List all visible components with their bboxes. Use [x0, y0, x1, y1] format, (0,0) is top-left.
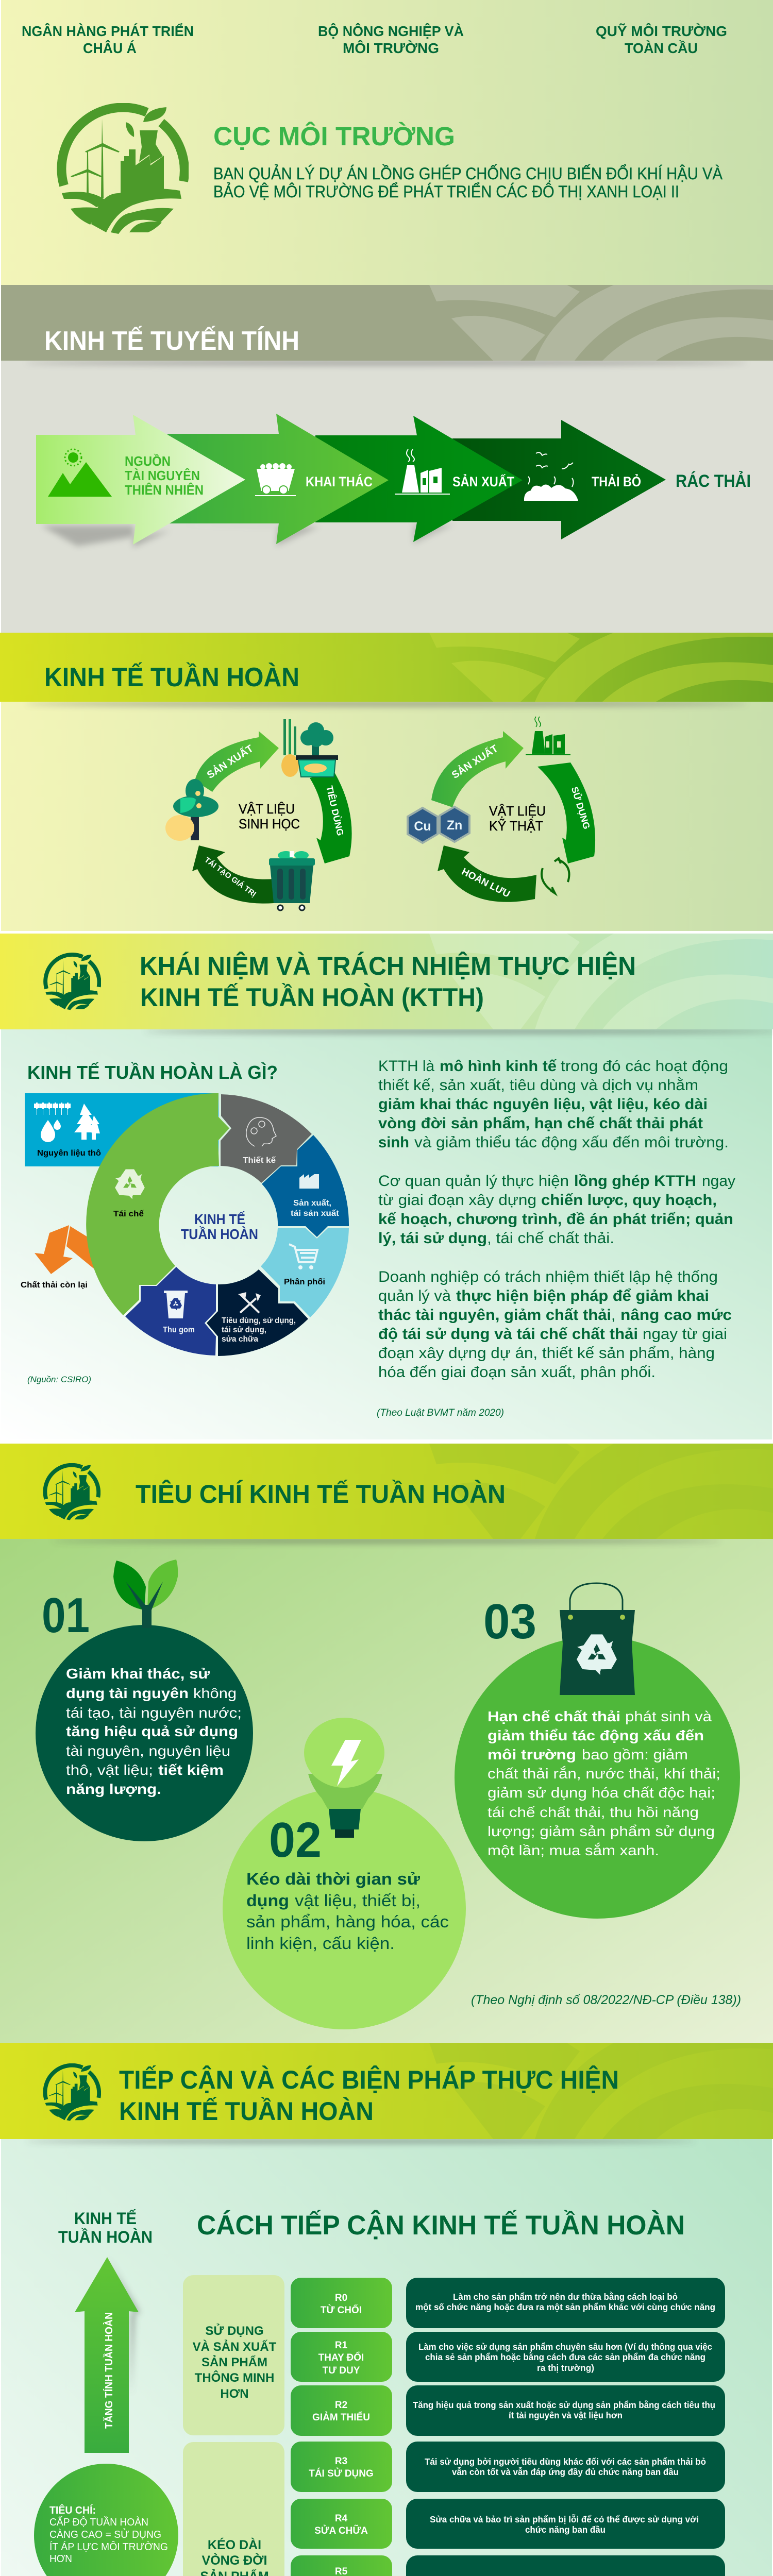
label: waste: RÁC THẢI [676, 471, 751, 491]
heading [119, 2065, 619, 2126]
biological cycle [165, 719, 352, 910]
subheading: CÁCH TIẾP CẬN KINH TẾ TUẦN HOÀN [197, 2209, 685, 2241]
text block: agencies: lồng ghép KTTH [574, 1173, 696, 1190]
text block: enterprises: đoạn xây dựng dự án, thiết kế sản phẩm, hàng [378, 1345, 715, 1362]
title: CỤC MÔI TRƯỜNG [213, 121, 455, 151]
panel: criteria [0, 1444, 773, 2043]
criterion 1: Giảm khai thác, sử [66, 1666, 210, 1682]
criterion 3: tái chế chất thải, thu hồi năng [488, 1804, 699, 1820]
technical cycle: HOÀN LƯU [460, 866, 512, 900]
icon: mining cart [255, 463, 296, 496]
criterion 3 [455, 1583, 740, 1919]
arrow chain [36, 414, 666, 547]
text block: enterprises: ngay từ giai [643, 1326, 727, 1343]
text block: agencies: ngay [702, 1173, 735, 1190]
subtitle: BAN QUẢN LÝ DỰ ÁN LỒNG GHÉP CHỐNG CHỊU BIẾN ĐỔI KHÍ HẬU VÀ [213, 164, 723, 183]
R4 row [291, 2499, 725, 2549]
segment: production: Sản xuất, [293, 1199, 331, 1208]
label: SINH HỌC [239, 816, 300, 832]
R4 row: SỬA CHỮA [314, 2525, 368, 2536]
subheading: KINH TẾ TUẦN HOÀN LÀ GÌ? [27, 1062, 278, 1083]
text block: definition: thiết kế, sản xuất, tiêu dùng và dịch vụ nhằm [378, 1077, 698, 1094]
step: natural resources [125, 453, 204, 498]
partner labels [22, 23, 727, 56]
step: production: SẢN XUẤT [452, 473, 514, 489]
criteria oval: ÍT ÁP LỰC MÔI TRƯỜNG [49, 2541, 168, 2553]
criterion 1: tiết kiệm [158, 1762, 224, 1778]
text block: definition: vòng đời sản phẩm, hạn chế chất thải phát [378, 1115, 703, 1132]
label [489, 803, 546, 834]
source: (Nguồn: CSIRO) [27, 1375, 91, 1384]
heading: KINH TẾ TUẦN HOÀN (KTTH) [140, 983, 484, 1012]
R2 row: R2 [335, 2400, 347, 2411]
segment: distribution [261, 1228, 349, 1317]
orange waste arrow [35, 1225, 95, 1274]
heading [140, 952, 636, 1012]
step: natural resources: THIÊN NHIÊN [125, 482, 204, 498]
criterion 1: thô, vật liệu; [66, 1762, 153, 1778]
criterion 2 [223, 1718, 466, 2029]
icon: recycle loop [542, 858, 569, 893]
criterion 2: Kéo dài thời gian sử [246, 1870, 421, 1888]
icon: logo [45, 1465, 98, 1520]
segment: recycling: Tái chế [113, 1210, 144, 1218]
R3 row: R3 [335, 2456, 347, 2467]
R1 row: Làm cho việc sử dụng sản phẩm chuyên sâu hơn (Ví dụ thông qua việc [418, 2342, 712, 2352]
step: extraction: KHAI THÁC [306, 473, 373, 489]
panel: circular economy [0, 633, 773, 931]
criterion 2: 02 [269, 1812, 322, 1868]
text block: enterprises: nâng cao mức [620, 1307, 732, 1324]
panel: linear economy [1, 285, 773, 633]
criterion 2: vật liệu, thiết bị, [295, 1891, 421, 1910]
criterion 3: 03 [483, 1594, 536, 1649]
criterion 2: linh kiện, cấu kiện. [246, 1934, 395, 1953]
text block: enterprises: Doanh nghiệp có trách nhiệm thiết lập hệ thống [378, 1268, 718, 1285]
text block: definition: mô hình kinh tế [440, 1058, 557, 1075]
R1 row: ra thị trường) [537, 2363, 594, 2373]
R0 row: Làm cho sản phẩm trở nên dư thừa bằng cách loại bỏ [453, 2291, 678, 2302]
segment: consumption: Tiêu dùng, sử dụng, [222, 1316, 296, 1325]
partner labels: CHÂU Á [83, 40, 137, 56]
technical cycle [408, 717, 595, 902]
text block: agencies: , tái chế chất thải. [487, 1230, 614, 1247]
R3 row [291, 2442, 725, 2492]
R4 row: Sửa chữa và bảo trì sản phẩm bị lỗi để có thể được sử dụng với [430, 2514, 699, 2524]
segment: design: Thiết kế [243, 1156, 276, 1165]
icon: copper and zinc: Cu [414, 819, 431, 834]
criterion 3: phát sinh và [625, 1708, 712, 1724]
criterion 3: môi trường [488, 1747, 576, 1762]
icon: recycle bag [560, 1583, 635, 1695]
segment: consumption [207, 1269, 308, 1356]
criterion 3: chất thải rắn, nước thải, khí thải; [488, 1766, 720, 1782]
R4 row: chức năng ban đầu [525, 2524, 606, 2535]
R0 row [291, 2278, 725, 2328]
donut centre label [181, 1211, 258, 1242]
subtitle: BẢO VỆ MÔI TRƯỜNG ĐỂ PHÁT TRIỂN CÁC ĐÔ THỊ XANH LOẠI II [213, 182, 679, 201]
donut chart [86, 1093, 349, 1356]
text block: definition: và giảm thiểu tác động xấu đến môi trường. [414, 1134, 729, 1151]
partner labels: TOÀN CẦU [625, 40, 698, 56]
group: smarter use: VÀ SẢN XUẤT [193, 2339, 277, 2354]
icon: logo [45, 2065, 99, 2121]
source: (Theo Nghị định số 08/2022/NĐ-CP (Điều 138)) [471, 1993, 741, 2007]
panel: header [1, 0, 773, 285]
segment: recycling [86, 1093, 229, 1315]
subtitle [213, 164, 723, 201]
donut centre label: KINH TẾ [194, 1211, 245, 1227]
icon: copper and zinc: Zn [447, 818, 462, 833]
group: smarter use: HƠN [220, 2387, 249, 2401]
partner labels: BỘ NÔNG NGHIỆP VÀ [318, 23, 464, 39]
panel: approaches and measures [0, 2043, 773, 2576]
text block: agencies: lý, tái sử dụng [378, 1230, 487, 1247]
biological cycle: SẢN XUẤT [205, 742, 256, 781]
text block: definition [378, 1058, 729, 1151]
step: natural resources: NGUỒN [125, 453, 171, 469]
segment: collection [125, 1267, 216, 1355]
R3 row: vẫn còn tốt và vẫn đáp ứng đầy đủ chức năng ban đầu [452, 2466, 679, 2477]
criterion 3: bao gồm: giảm [582, 1747, 688, 1762]
step: natural resources: TÀI NGUYÊN [125, 468, 200, 483]
text block: enterprises: thác tài nguyên, giảm chất thải [378, 1307, 611, 1324]
text block: definition: giảm khai thác nguyên liệu, vật liệu, kéo dài [378, 1096, 708, 1113]
criterion 1: không [193, 1685, 237, 1701]
text block: agencies [378, 1173, 735, 1247]
text block: enterprises: , [611, 1307, 615, 1324]
R1 row: chia sẻ sản phẩm hoặc bằng cách đưa các sản phẩm đa chức năng [425, 2351, 705, 2362]
criterion 3: lượng; giảm sản phẩm sử dụng [488, 1823, 715, 1839]
R1 row: THAY ĐỔI [318, 2352, 364, 2363]
R2 row: ít tài nguyên và vật liệu hơn [509, 2410, 623, 2420]
partner labels: NGÂN HÀNG PHÁT TRIỂN [22, 23, 194, 39]
criterion 1: tài nguyên, nguyên liệu [66, 1743, 230, 1759]
icon: logo [61, 107, 184, 234]
label: circular economy [58, 2209, 153, 2246]
label: circular economy: KINH TẾ [74, 2209, 137, 2228]
criterion 3: giảm thiểu tác động xấu đến [488, 1727, 704, 1743]
biological cycle: TIÊU DÙNG [324, 785, 346, 837]
source: (Theo Luật BVMT năm 2020) [377, 1408, 504, 1418]
panel: concept and responsibility [0, 934, 773, 1439]
segment: design [221, 1094, 312, 1183]
text block: agencies: kế hoạch, chương trình, đề án phát triển; quản [378, 1211, 733, 1228]
R3 row: TÁI SỬ DỤNG [309, 2468, 374, 2479]
raw material box [25, 1093, 219, 1166]
group: smarter use: SỬ DỤNG [205, 2323, 264, 2338]
segment: distribution: Phân phối [284, 1278, 325, 1286]
icon: logo [45, 955, 99, 1010]
R2 row [291, 2385, 725, 2436]
icon: light bulb [304, 1718, 384, 1838]
criteria oval: TIÊU CHÍ: [49, 2504, 96, 2516]
R4 row: R4 [335, 2513, 348, 2524]
criteria oval: CÀNG CAO = SỬ DỤNG [49, 2528, 161, 2540]
criterion 3: Hạn chế chất thải [488, 1708, 620, 1724]
icon: sprout [113, 1560, 178, 1628]
heading: TIÊU CHÍ KINH TẾ TUẦN HOÀN [136, 1480, 506, 1509]
R3 row: Tái sử dụng bởi người tiêu dùng khác đối với các sản phẩm thải bỏ [425, 2456, 706, 2467]
R5 row [291, 2555, 725, 2576]
text block: enterprises: thực hiện biện pháp để giảm khai [456, 1287, 709, 1304]
icon: factory [395, 449, 450, 495]
criterion 1: năng lượng. [66, 1781, 161, 1797]
R1 row [291, 2332, 725, 2382]
technical cycle: SỬ DỤNG [569, 785, 593, 831]
R0 row: R0 [335, 2293, 347, 2303]
segment: consumption: sửa chữa [222, 1335, 258, 1344]
criterion 1: tái tạo, tài nguyên nước; [66, 1705, 242, 1721]
icon: vegetables [281, 719, 338, 777]
heading: KINH TẾ TUẦN HOÀN [119, 2097, 374, 2126]
icon: factory [526, 717, 570, 755]
heading: KHÁI NIỆM VÀ TRÁCH NHIỆM THỰC HIỆN [140, 952, 636, 980]
group: extend lifespan: KÉO DÀI [208, 2537, 261, 2552]
partner labels: MÔI TRƯỜNG [343, 40, 439, 56]
criterion 3: giảm sử dụng hóa chất độc hại; [488, 1785, 715, 1801]
label: VẬT LIỆU [489, 803, 546, 819]
label: VẬT LIỆU [239, 801, 295, 817]
text block: definition: KTTH là [378, 1058, 434, 1075]
criterion 1: tăng hiệu quả sử dụng [66, 1723, 238, 1739]
step: disposal: THẢI BỎ [592, 473, 641, 489]
criteria oval [34, 2464, 178, 2576]
icon: waste heap [524, 452, 578, 501]
icon: tree and apple [165, 779, 219, 841]
criterion 3: một lần; mua sắm xanh. [488, 1842, 659, 1858]
group: extend lifespan [183, 2442, 284, 2576]
label: circular economy: TUẦN HOÀN [58, 2228, 153, 2246]
icon: mountain and sun [48, 449, 112, 497]
label [239, 801, 300, 832]
text block: enterprises: quản lý và [378, 1287, 451, 1304]
raw material box: Nguyên liệu thô [37, 1149, 101, 1158]
arrow: increasing circularity upper [75, 2257, 140, 2453]
donut centre label: TUẦN HOÀN [181, 1226, 258, 1242]
text block: definition: trong đó các hoạt động [561, 1058, 728, 1075]
heading: KINH TẾ TUYẾN TÍNH [44, 326, 299, 356]
heading: TIẾP CẬN VÀ CÁC BIỆN PHÁP THỰC HIỆN [119, 2065, 619, 2094]
segment: production: tái sản xuất [291, 1209, 340, 1218]
segment: production [262, 1135, 349, 1237]
segment: consumption: tái sử dụng, [222, 1326, 266, 1334]
group: smarter use [183, 2275, 284, 2435]
text block: agencies: từ giai đoạn xây dựng [378, 1192, 536, 1209]
criteria oval: HƠN [49, 2553, 72, 2565]
icon: bin [269, 851, 315, 910]
R0 row: TỪ CHỐI [321, 2304, 362, 2316]
criterion 2: sản phẩm, hàng hóa, các [246, 1912, 449, 1931]
label: KỸ THẬT [489, 818, 543, 834]
R1 row: R1 [335, 2340, 348, 2351]
heading: KINH TẾ TUẦN HOÀN [44, 662, 299, 692]
R2 row: Tăng hiệu quả trong sản xuất hoặc sử dụng sản phẩm bằng cách tiêu thụ [413, 2399, 715, 2410]
group: extend lifespan: VÒNG ĐỜI [202, 2552, 267, 2568]
partner labels: QUỸ MÔI TRƯỜNG [596, 23, 727, 39]
text block: agencies: chiến lược, quy hoạch, [541, 1192, 717, 1209]
criteria oval: CẤP ĐỘ TUẦN HOÀN [49, 2516, 148, 2528]
arrow: increasing circularity upper: TĂNG TÍNH TUẦN HOÀN [103, 2312, 115, 2429]
criterion 1 [36, 1560, 253, 1841]
segment: collection: Thu gom [163, 1326, 195, 1334]
text block: enterprises: hóa đến giai đoạn sản xuất, phân phối. [378, 1364, 656, 1381]
R2 row: GIẢM THIỂU [312, 2412, 370, 2423]
R1 row: TƯ DUY [323, 2365, 360, 2376]
group: smarter use: SẢN PHẨM [201, 2354, 267, 2369]
technical cycle: SẢN XUẤT [449, 742, 500, 781]
text block: definition: sinh [378, 1134, 409, 1151]
label: remaining waste: Chất thải còn lại [21, 1281, 88, 1290]
text block: agencies: Cơ quan quản lý thực hiện [378, 1173, 569, 1190]
biological cycle: TÁI TẠO GIÁ TRỊ [203, 855, 258, 899]
criterion 1: 01 [42, 1588, 90, 1643]
group: smarter use: THÔNG MINH [195, 2370, 274, 2385]
text block: enterprises: độ tái sử dụng và tái chế chất thải [378, 1326, 638, 1343]
criterion 2: dụng [246, 1891, 289, 1910]
icon: copper and zinc [408, 807, 469, 843]
text block: enterprises [378, 1268, 732, 1381]
R0 row: một số chức năng hoặc đưa ra một sản phẩm khác với cùng chức năng [415, 2302, 715, 2312]
criterion 1: dụng tài nguyên [66, 1685, 189, 1701]
